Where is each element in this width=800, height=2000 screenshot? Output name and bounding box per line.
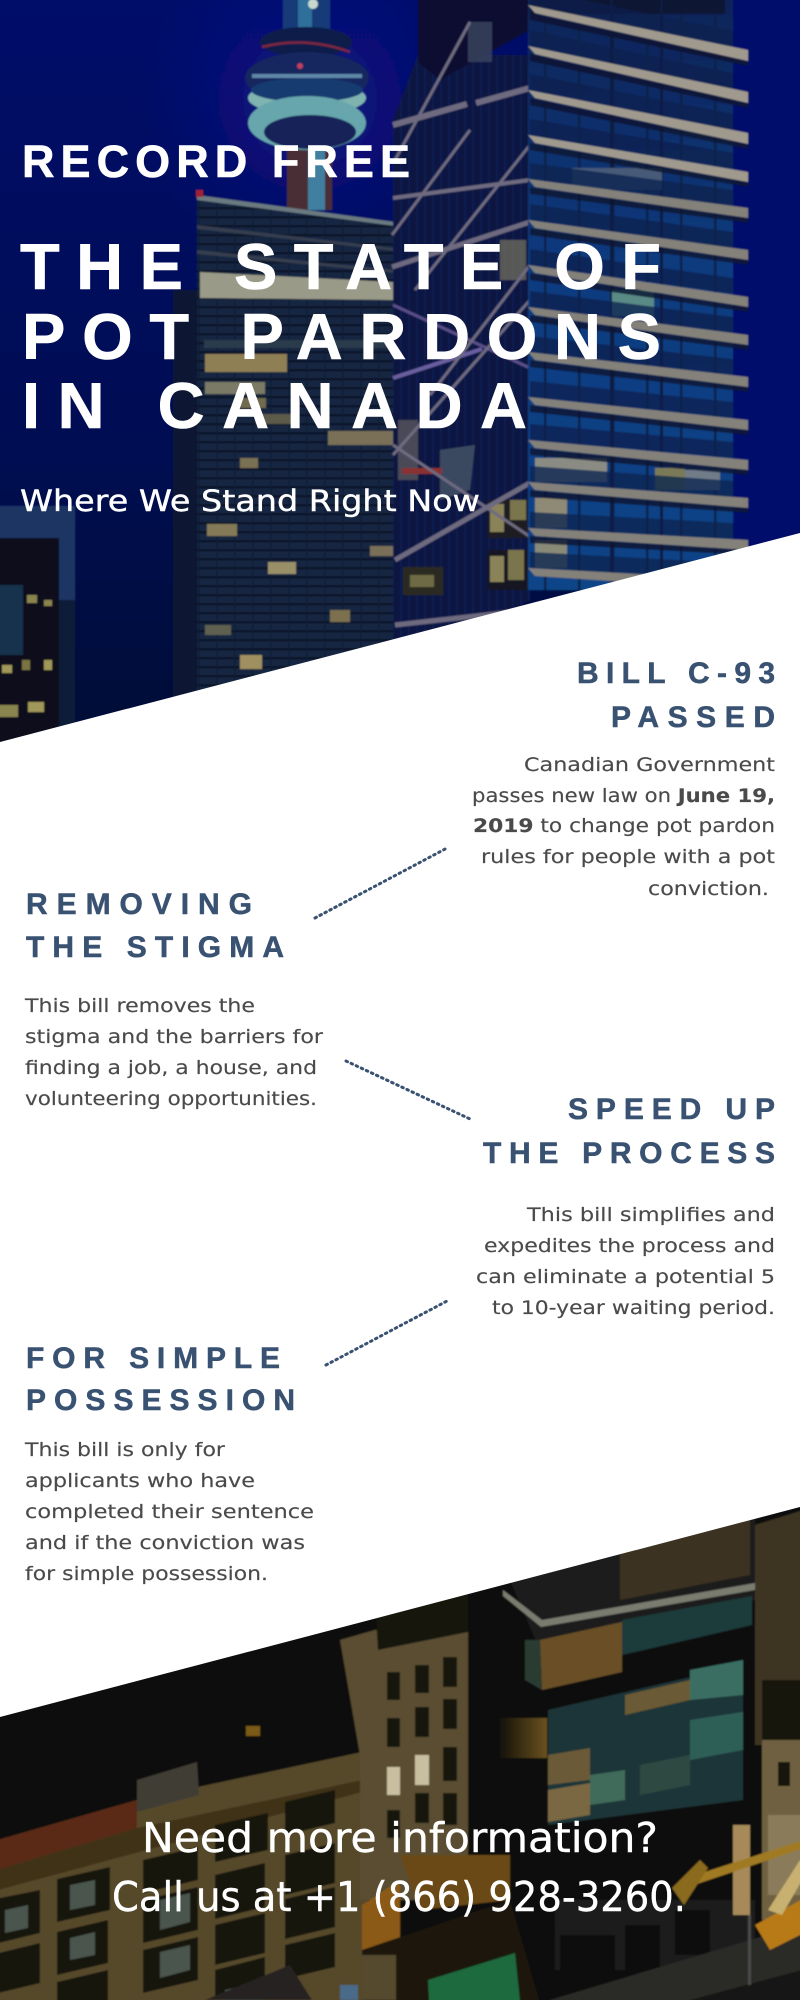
heading: POSSESSION [26,1384,295,1417]
heading: PASSED [611,701,775,734]
main title: THE STATE OF [20,230,661,303]
body text: conviction. [648,878,769,900]
body text: to 10-year waiting period. [492,1297,775,1319]
body text: can eliminate a potential 5 [476,1266,775,1288]
connector: Speed Up to For Simple Possession [326,1301,447,1365]
street level with lift and dumpster [362,1838,800,2000]
call to action: Call us at +1 (866) 928-3260. [112,1873,686,1921]
body text: for simple possession. [25,1563,268,1585]
heading: SPEED UP [568,1093,775,1126]
kicker: RECORD FREE: RECORD FREE [22,136,410,187]
balconied tower, right [528,0,748,590]
heading [483,1093,775,1170]
main title: IN CANADA [22,369,527,442]
section: Removing the stigma [24,888,323,1110]
body text: expedites the process and [484,1235,775,1257]
connector: Removing the Stigma to Speed Up [346,1061,470,1119]
office tower, centre [173,190,400,740]
hero photo: Toronto skyline at night [0,0,800,770]
body text: This bill is only for [24,1439,225,1461]
connector: Bill C-93 to Removing the Stigma [315,848,447,918]
icon: CN Tower [245,0,369,210]
right beige building [755,1505,800,1920]
body text: passes new law on June 19, [472,785,775,807]
heading [577,657,775,734]
heading [26,1342,295,1417]
section: For simple possession [24,1342,314,1585]
beige mid-rise with dark windows [340,1575,468,1900]
subtitle: Where We Stand Right Now [20,484,480,518]
call to action: Need more information? [142,1814,658,1862]
braced tower, dark core [392,0,535,680]
body text: volunteering opportunities. [25,1088,317,1110]
small building, lower left [0,506,75,750]
body text: rules for people with a pot [481,846,775,868]
body text: This bill simplifies and [526,1204,775,1226]
body text: applicants who have [25,1470,255,1492]
body text: finding a job, a house, and [25,1057,317,1079]
body text: stigma and the barriers for [25,1026,323,1048]
body text [476,1204,775,1319]
heading [26,888,284,964]
left low-rise building [0,1630,372,2000]
heading: THE STIGMA [26,931,284,964]
body text [24,995,323,1110]
heading: THE PROCESS [483,1137,775,1170]
footer photo: Toronto street from above [0,1490,800,2000]
body text [472,754,775,900]
main title [20,230,661,442]
main title: POT PARDONS [22,300,661,373]
dark glass building with teal windows [468,1510,762,1985]
body text: completed their sentence [25,1501,314,1523]
call to action [112,1814,686,1921]
body text [24,1439,314,1585]
heading: BILL C-93 [577,657,775,690]
body text: Canadian Government [524,754,775,776]
body text: 2019 to change pot pardon [473,815,775,837]
body text: and if the conviction was [25,1532,305,1554]
title block [20,136,661,518]
heading: REMOVING [26,888,252,921]
body text: This bill removes the [24,995,255,1017]
section: Speed up the process [476,1093,775,1319]
section: Bill C-93 passed [472,657,775,900]
heading: FOR SIMPLE [26,1342,280,1375]
